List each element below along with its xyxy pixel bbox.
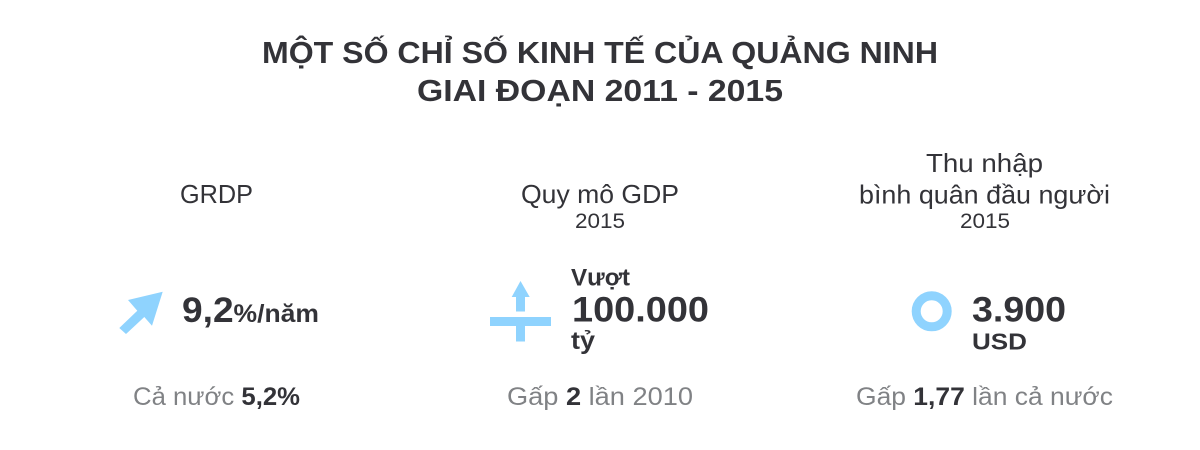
- value: 3.900 USD: 3.900: [972, 290, 1066, 330]
- heading: Thu nhập bình quân đầu người 2015: [859, 148, 1110, 233]
- value: Vượt 100.000 tỷ: 100.000: [572, 290, 709, 330]
- comparison: Cả nước 5,2%: Cả nước 5,2%: [133, 383, 300, 411]
- title: GIAI ĐOẠN 2011 - 2015: [417, 73, 783, 108]
- value: Vượt 100.000 tỷ: [571, 264, 709, 355]
- icon: plus with up arrow: [490, 281, 551, 342]
- title: MỘT SỐ CHỈ SỐ KINH TẾ CỦA QUẢNG NINH: [262, 34, 938, 70]
- value: Vượt 100.000 tỷ: Vượt: [571, 264, 630, 292]
- title: [262, 34, 938, 108]
- heading: Thu nhập bình quân đầu người 2015: 2015: [960, 210, 1010, 233]
- value: 3.900 USD: USD: [972, 328, 1027, 354]
- panel: GRDP: [119, 179, 319, 411]
- panel: Quy mô GDP: [490, 179, 709, 411]
- heading: Quy mô GDP 2015: [521, 179, 679, 233]
- heading: Quy mô GDP 2015: 2015: [575, 210, 625, 233]
- comparison: Gấp 2 lần 2010: Gấp 2 lần 2010: [507, 383, 693, 411]
- value: 9,2%/năm: 9,2%/năm: [182, 291, 319, 330]
- value: Vượt 100.000 tỷ: tỷ: [571, 327, 595, 355]
- value: 3.900 USD: [972, 290, 1066, 354]
- heading: Quy mô GDP 2015: Quy mô GDP: [521, 179, 679, 209]
- icon: ring: [916, 296, 947, 327]
- heading: GRDP: GRDP: [180, 179, 253, 209]
- heading: Thu nhập bình quân đầu người 2015: Thu nhập: [926, 148, 1043, 178]
- heading: Thu nhập bình quân đầu người 2015: bình quân đầu người: [859, 180, 1110, 210]
- comparison: Gấp 1,77 lần cả nước: Gấp 1,77 lần cả nước: [856, 383, 1113, 411]
- icon: diagonal up arrow: [119, 292, 163, 334]
- panel: Thu nhập bình quân đầu người: [856, 148, 1113, 411]
